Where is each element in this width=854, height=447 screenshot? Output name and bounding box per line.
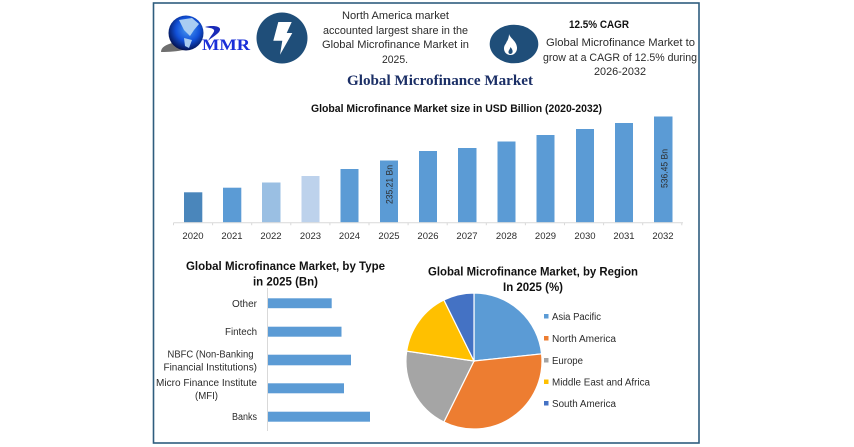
text: CAGR callout bbox=[543, 19, 697, 78]
chart title: Global Microfinance Market, by Type bbox=[186, 261, 385, 273]
icon: flame bbox=[490, 25, 538, 63]
legend: Middle East and Africa bbox=[552, 378, 650, 388]
logo: MMR globe: MMR bbox=[202, 37, 251, 54]
chart title: In 2025 (%) bbox=[503, 282, 563, 294]
logo: MMR globe bbox=[161, 16, 251, 54]
data label 2025: 235.21 Bn bbox=[384, 165, 396, 204]
category labels: Micro Finance Institute bbox=[156, 378, 257, 389]
category labels: Fintech bbox=[225, 327, 257, 338]
outer frame bbox=[154, 3, 699, 443]
category labels: Financial Institutions) bbox=[164, 362, 257, 374]
text: CAGR callout: 12.5% CAGR bbox=[569, 19, 629, 31]
category labels: Other bbox=[232, 299, 258, 310]
legend: North America bbox=[552, 334, 616, 345]
text: North America share: 2025. bbox=[382, 54, 408, 66]
year labels: 2026 bbox=[417, 231, 439, 242]
year labels: 2027 bbox=[456, 231, 478, 242]
text: CAGR callout: 2026-2032 bbox=[594, 66, 646, 78]
legend: Europe bbox=[552, 356, 583, 367]
year labels: 2028 bbox=[496, 231, 517, 242]
text: CAGR callout: grow at a CAGR of 12.5% during bbox=[543, 52, 697, 64]
year labels: 2029 bbox=[535, 231, 556, 242]
icon: lightning bolt bbox=[256, 12, 308, 64]
chart title: in 2025 (Bn) bbox=[253, 276, 318, 288]
text: North America share: Global Microfinance Market in bbox=[322, 39, 469, 51]
year labels: 2023 bbox=[300, 231, 321, 242]
year labels: 2021 bbox=[221, 231, 243, 242]
text: North America share: accounted largest share in the bbox=[323, 25, 468, 37]
text: North America share: North America market bbox=[342, 10, 449, 22]
text: CAGR callout: Global Microfinance Market to bbox=[546, 37, 695, 49]
chart title: Global Microfinance Market size in USD Billion (2020-2032) bbox=[311, 103, 602, 115]
year labels bbox=[182, 231, 674, 242]
pie slices bbox=[406, 293, 542, 429]
text: North America share bbox=[322, 10, 469, 66]
category labels: Banks bbox=[232, 412, 257, 423]
legend: Asia Pacific bbox=[552, 312, 601, 323]
title: Global Microfinance Market bbox=[347, 73, 533, 89]
chart title: Global Microfinance Market, by Region bbox=[428, 266, 638, 278]
data label 2032: 536.45 Bn bbox=[659, 149, 670, 188]
chart title bbox=[428, 266, 638, 294]
bars bbox=[184, 116, 672, 222]
year labels: 2022 bbox=[260, 231, 282, 242]
bar chart: by type bbox=[156, 261, 385, 431]
chart title bbox=[186, 261, 385, 288]
legend bbox=[544, 312, 650, 410]
bar chart: market size bbox=[174, 103, 683, 242]
year labels: 2031 bbox=[613, 231, 635, 242]
year labels: 2020 bbox=[182, 231, 204, 242]
category labels: NBFC (Non-Banking bbox=[168, 350, 254, 360]
legend: South America bbox=[552, 399, 616, 410]
category labels: (MFI) bbox=[195, 391, 218, 402]
bars bbox=[268, 298, 370, 422]
pie chart: by region bbox=[406, 266, 650, 429]
category labels bbox=[156, 299, 258, 423]
year labels: 2025 bbox=[378, 231, 400, 242]
year labels: 2030 bbox=[574, 231, 596, 242]
year labels: 2024 bbox=[339, 231, 360, 242]
year labels: 2032 bbox=[652, 231, 674, 242]
